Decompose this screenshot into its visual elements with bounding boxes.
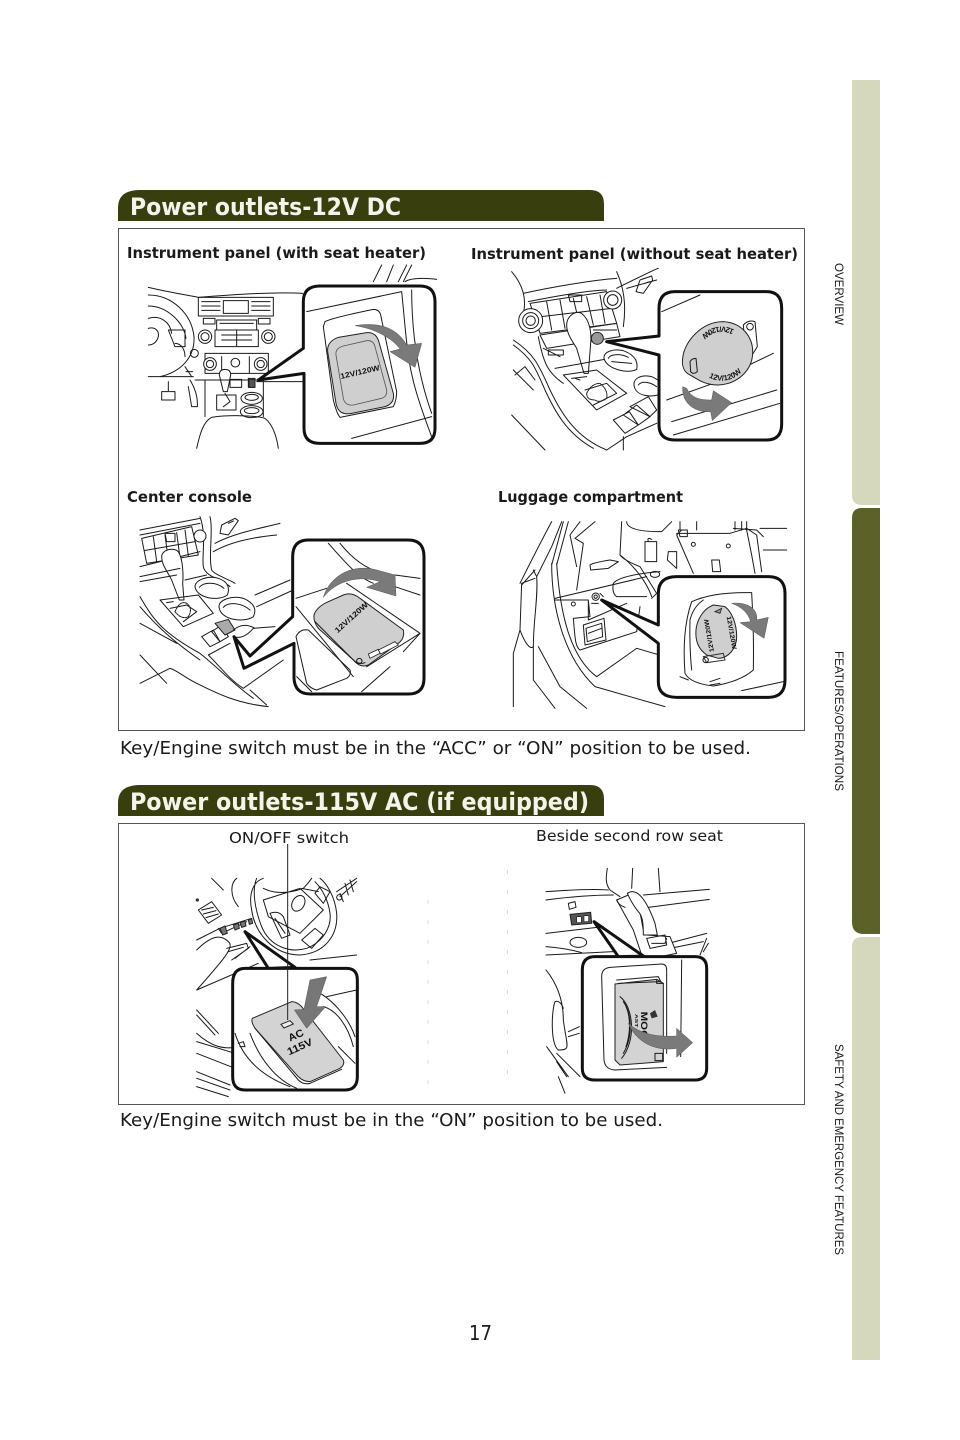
illustration: center console (140, 517, 424, 707)
illustration: instrument panel without seat heater (511, 268, 784, 450)
label: center console: Center console (127, 488, 252, 506)
label: on/off switch: ON/OFF switch (229, 829, 349, 847)
side label: features/operations: FEATURES/OPERATIONS (832, 651, 846, 791)
illustration: AC switch on instrument panel: AC (287, 1028, 306, 1044)
label: instrument panel without seat heater: Instrument panel (without seat heater) (471, 245, 798, 263)
heading banner: 12V DC: Power outlets-12V DC (130, 193, 401, 221)
label: instrument panel with seat heater: Instrument panel (with seat heater) (127, 244, 426, 262)
side label: overview: OVERVIEW (832, 263, 846, 326)
illustration: instrument panel without seat heater: 12V/120W (709, 368, 741, 381)
label: luggage compartment: Luggage compartment (498, 488, 684, 506)
note: 12V key switch position: Key/Engine switch must be in the “ACC” or “ON” position to be used. (120, 739, 751, 759)
panel: 12V DC outlets (118, 228, 804, 730)
illustration: center console: 12V/120W (333, 600, 371, 635)
panel: 115V AC outlets (118, 824, 804, 1104)
side navigation tabs (852, 80, 880, 1360)
heading banner: 12V DC (118, 190, 604, 221)
illustration: outlet beside second row seat (546, 868, 709, 1093)
illustration: instrument panel without seat heater: 12V/120W (702, 326, 734, 340)
illustration: luggage compartment: 12V/120W (725, 616, 737, 650)
illustration: instrument panel with seat heater: 12V/120W (339, 363, 381, 381)
illustration: outlet beside second row seat: AST (634, 1014, 639, 1028)
note: 115V key switch position: Key/Engine switch must be in the “ON” position to be used. (120, 1111, 663, 1131)
label: beside second row seat: Beside second row seat (536, 827, 723, 845)
illustration: luggage compartment (513, 522, 787, 708)
page number: 17 (469, 1321, 492, 1345)
side label: safety and emergency features: SAFETY AND EMERGENCY FEATURES (832, 1044, 846, 1255)
illustration: outlet beside second row seat: MOC (639, 1012, 649, 1039)
scan artefacts between images (428, 870, 508, 1085)
illustration: luggage compartment: 12V/120W (703, 618, 716, 653)
heading banner: 115V AC: Power outlets-115V AC (if equipped) (130, 788, 589, 816)
illustration: AC switch on instrument panel (196, 844, 357, 1097)
illustration: AC switch on instrument panel: 115V (286, 1037, 315, 1058)
illustration: instrument panel with seat heater (148, 265, 437, 448)
tab: safety and emergency (852, 937, 880, 1360)
tab: overview (852, 80, 880, 505)
tab: features and operations (852, 508, 880, 934)
